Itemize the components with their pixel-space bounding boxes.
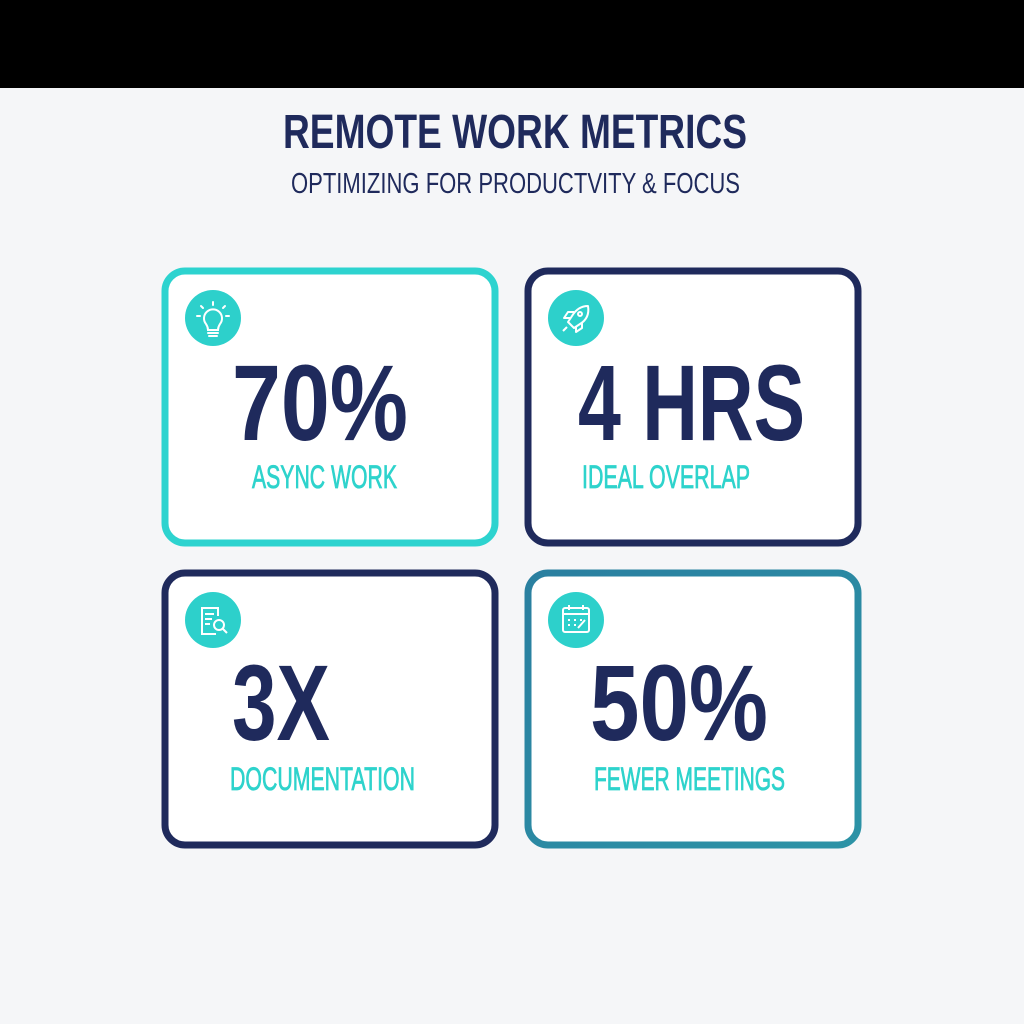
panel: fewer meetings <box>528 573 858 845</box>
top black bar <box>0 0 1024 88</box>
big number: 50% <box>590 642 768 763</box>
label: IDEAL OVERLAP <box>582 459 750 495</box>
panel: ideal overlap <box>528 271 858 543</box>
icon: lightbulb <box>185 290 241 346</box>
label: FEWER MEETINGS <box>594 761 785 797</box>
icon: rocket <box>548 290 604 346</box>
title: REMOTE WORK METRICS <box>283 106 747 159</box>
icon: calendar <box>548 592 604 648</box>
big number: 4 HRS <box>578 342 805 463</box>
panel: documentation <box>165 573 495 845</box>
big number: 70% <box>232 342 408 463</box>
label: DOCUMENTATION <box>230 761 415 797</box>
big number: 3X <box>232 642 330 763</box>
panel: async work <box>165 271 495 543</box>
subtitle: OPTIMIZING FOR PRODUCTVITY & FOCUS <box>291 168 740 200</box>
label: ASYNC WORK <box>252 459 397 495</box>
icon: document search <box>185 592 241 648</box>
